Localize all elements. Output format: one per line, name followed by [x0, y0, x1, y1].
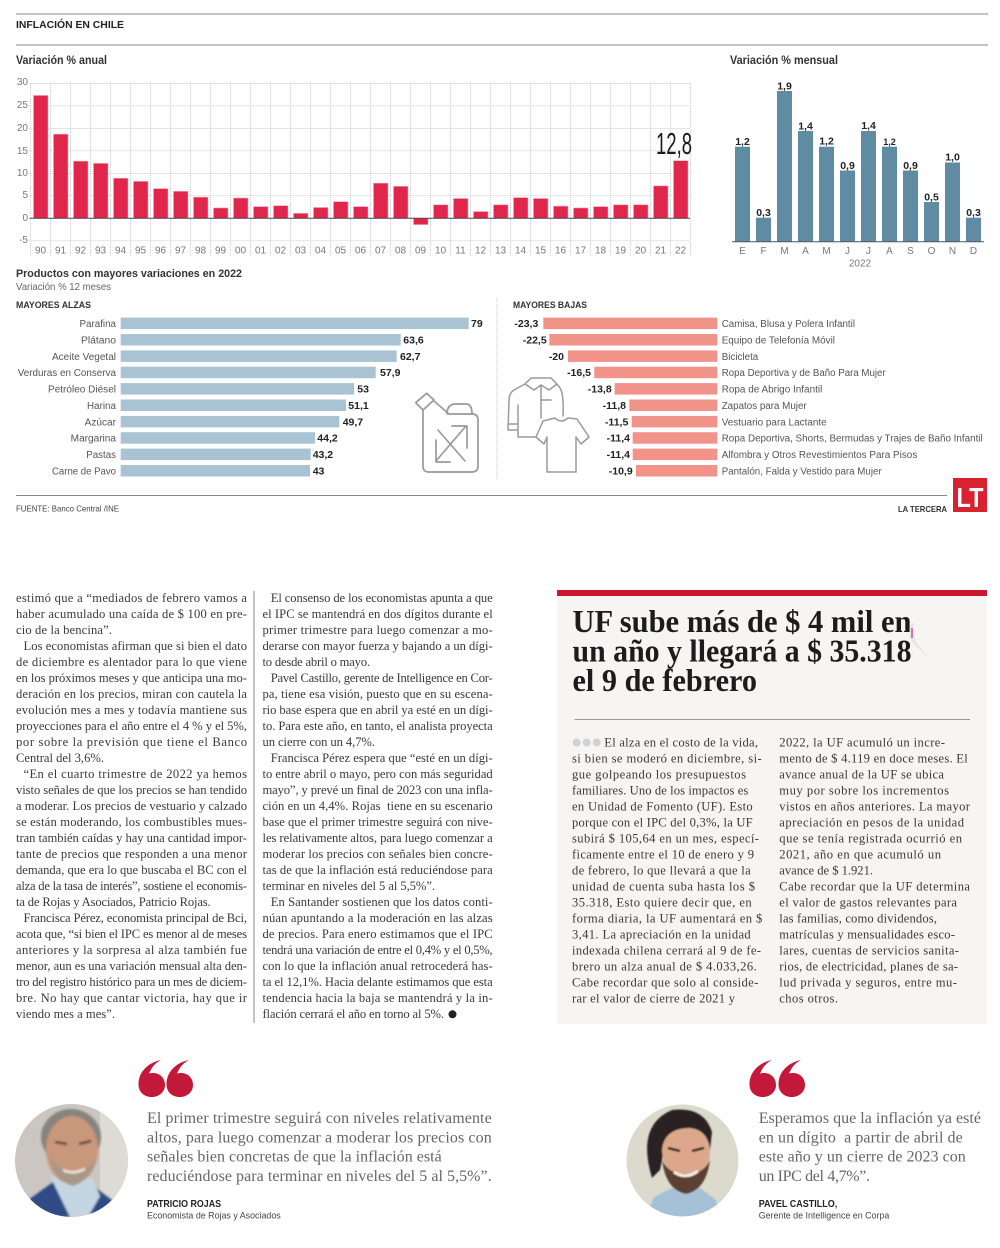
- product labels: increases: Azúcar: [85, 417, 117, 428]
- title: Inflación en Chile: INFLACIÓN EN CHILE: [16, 18, 124, 31]
- values: decreases: -20: [549, 351, 564, 363]
- monthly values: 0,9: [903, 160, 918, 172]
- article body: column 2: pa, tiene esa visión, puesto que en su escena-: [262, 687, 493, 701]
- x axis years: 17: [575, 246, 586, 256]
- quote text: en un dígito a partir de abril de: [759, 1129, 963, 1146]
- x axis years: 02: [275, 246, 286, 256]
- month labels: 2022: [849, 258, 872, 270]
- article body: column 1: por sobre la previsión que tiene el Banco: [16, 735, 247, 749]
- x axis years: 19: [615, 246, 626, 256]
- quote text: reduciéndose para terminar en niveles del 5 al 5,5%”.: [147, 1168, 492, 1185]
- article body: column 2: les relativamente altos, para luego comenzar a: [262, 831, 493, 845]
- month labels: J: [845, 246, 850, 257]
- x axis years: 96: [155, 246, 166, 256]
- article body: column 1: alza de la tasa de interés”, sostiene el economis-: [16, 879, 247, 893]
- x axis years: 09: [415, 246, 426, 256]
- product labels: increases: Harina: [87, 401, 116, 412]
- sidebar text: column 1: rar el valor de cierre de 2021 y: [572, 992, 736, 1006]
- sidebar text: column 1: El alza en el costo de la vida,: [604, 736, 758, 750]
- article body: column 2: primer trimestre para luego comenzar a mo-: [262, 623, 493, 637]
- sidebar text: column 1: 3,41. La apreciación en la unidad: [572, 928, 751, 942]
- article body: column 1: en los próximos meses y que anticipa una mo-: [16, 671, 247, 685]
- panel: largest decreases: [508, 300, 983, 477]
- sidebar text: column 2: Cabe recordar que la UF determina: [779, 880, 970, 894]
- sidebar text: column 2: lares, cuentas de servicios sanita-: [779, 944, 959, 958]
- heading: mayores bajas: MAYORES BAJAS: [513, 300, 587, 311]
- sidebar text: column 1: [572, 736, 762, 1006]
- sidebar text: column 2: vistos en años anteriores. La mayor: [779, 800, 971, 814]
- quote block: Patricio Rojas: [15, 1060, 492, 1222]
- x axis years: 10: [435, 246, 446, 256]
- article body: column 1: evolución mes a mes y todavía mantiene sus: [16, 703, 247, 717]
- article body: column 1: proyecciones para el año entre el 4 % y el 5%,: [16, 719, 247, 733]
- sidebar text: column 2: avance anual de la UF se ubica: [779, 768, 944, 782]
- product labels: decreases: Bicicleta: [722, 352, 759, 363]
- article body: column 2: mayo”, y prevé un final de 2023 con una infla-: [262, 783, 493, 797]
- quote text: [147, 1110, 492, 1185]
- y axis labels: 30: [17, 77, 28, 88]
- values: decreases: [514, 318, 633, 477]
- sidebar text: column 2: 2022, la UF acumuló un incre-: [779, 736, 945, 750]
- icon: clothes: [508, 378, 589, 472]
- values: decreases: -11,8: [603, 400, 626, 412]
- quote text: El primer trimestre seguirá con niveles relativamente: [147, 1110, 492, 1127]
- article body: column 1: “En el cuarto trimestre de 2022 ya hemos: [24, 767, 247, 781]
- values: decreases: -22,5: [523, 334, 547, 346]
- y axis labels: 25: [17, 100, 28, 111]
- quote text: un IPC del 4,7%”.: [759, 1168, 870, 1185]
- x axis years: 22: [675, 246, 686, 256]
- monthly values: 0,5: [924, 192, 939, 204]
- quote block: Pavel Castillo: [626, 1060, 981, 1222]
- y axis labels: 5: [22, 190, 28, 201]
- attribution: PAVEL CASTILLO,: [759, 1199, 837, 1210]
- product labels: increases: Aceite Vegetal: [52, 352, 116, 363]
- sidebar text: column 2: que se tenía registrada ocurrió en: [779, 832, 963, 846]
- monthly values: 1,2: [883, 137, 896, 147]
- article body: column 2: Pavel Castillo, gerente de Intelligence en Cor-: [271, 671, 493, 685]
- sidebar text: column 2: apreciación en pesos de la unidad: [779, 816, 965, 830]
- x axis years: 07: [375, 246, 386, 256]
- logo: La Tercera: LA TERCERA: [898, 504, 947, 514]
- month labels: A: [886, 246, 893, 257]
- headline: UF sube más de $ 4 mil en: [572, 603, 912, 639]
- y axis labels: 15: [17, 146, 28, 157]
- article body: column 1: cio de la bencina”.: [16, 623, 112, 637]
- portrait: Patricio Rojas: [15, 1104, 128, 1217]
- article body: column 1: a moderar. Los precios de vestuario y calzado: [16, 799, 247, 813]
- article body: column 2: base que el primer trimestre seguirá con nive-: [262, 815, 493, 829]
- sidebar text: column 2: muy por sobre los incrementos: [779, 784, 949, 798]
- article body: column 1: deración en los precios, miran con cautela la: [16, 687, 247, 701]
- sidebar text: column 2: las familias, como dividendos,: [779, 912, 937, 926]
- sidebar text: column 1: gue golpeando los presupuestos: [572, 768, 746, 782]
- sidebar text: column 1: subirá $ 105,64 en un mes, especí-: [572, 832, 759, 846]
- footer: source: FUENTE: Banco Central /INE: [16, 504, 119, 514]
- sidebar text: column 1: indexada chilena cerrará al 9 de fe-: [572, 944, 761, 958]
- sidebar text: column 2: el valor de gastos relevantes para: [779, 896, 957, 910]
- article body: column 2: tendencia hacia la baja se mantendrá y la in-: [262, 991, 493, 1005]
- icon: fuel can: [416, 393, 478, 472]
- product labels: decreases: Ropa de Abrigo Infantil: [722, 384, 822, 396]
- panel: monthly variation chart: [730, 55, 984, 270]
- month labels: M: [822, 246, 831, 257]
- x axis years: 04: [315, 246, 326, 256]
- article body: column 1: haber acumulado una caída de $ 100 en pre-: [16, 607, 247, 621]
- quote text: [759, 1110, 981, 1185]
- article body: column 1: de diciembre es alentador para lo que viene: [16, 655, 247, 669]
- article body: column 1: anteriores y la sorpresa al alza también fue: [16, 943, 247, 957]
- month labels: F: [760, 246, 767, 257]
- y axis labels: 20: [17, 123, 28, 134]
- x axis years: 20: [635, 246, 646, 256]
- values: increases: 44,2: [317, 433, 338, 445]
- x axis years: 11: [455, 246, 466, 256]
- heading: mayores alzas: MAYORES ALZAS: [16, 300, 91, 311]
- monthly values: 0,3: [966, 207, 981, 219]
- sidebar text: column 1: 35.318, Esto quiere decir que, en: [572, 896, 752, 910]
- bars: annual inflation: [34, 95, 688, 225]
- monthly values: [735, 80, 981, 219]
- article body: column 1: bre. No hay que cantar victoria, hay que ir: [16, 991, 248, 1005]
- article body: column 2: tas de que la inflación está reduciéndose para: [262, 863, 493, 877]
- monthly values: 1,9: [777, 80, 792, 92]
- values: increases: [313, 318, 483, 477]
- product labels: decreases: Alfombra y Otros Revestimientos Para Pisos: [722, 450, 917, 461]
- monthly values: 1,0: [945, 152, 960, 164]
- values: decreases: -23,3: [514, 318, 538, 330]
- heading: annual variation: Variación % anual: [16, 55, 107, 67]
- month labels: M: [780, 246, 789, 257]
- headline: el 9 de febrero: [572, 662, 757, 698]
- values: decreases: -10,9: [609, 465, 633, 477]
- bars: decreases: [543, 318, 717, 476]
- article body: column 2: de precios. Para enero estimamos que el IPC: [262, 927, 493, 941]
- x axis years: 06: [355, 246, 366, 256]
- article body: column 2: to. Para este año, en tanto, el analista proyecta: [262, 719, 493, 733]
- product labels: decreases: Ropa Deportiva, Shorts, Bermudas y Trajes de Baño Infantil: [722, 434, 983, 445]
- values: increases: 63,6: [403, 334, 424, 346]
- product labels: decreases: Zapatos para Mujer: [722, 401, 807, 412]
- x axis years: 93: [95, 246, 106, 256]
- values: increases: 79: [471, 318, 483, 330]
- article body: column 2: ción en un 4,4%. Rojas tiene en su escenario: [262, 799, 493, 813]
- headline: [572, 603, 912, 698]
- values: decreases: -11,5: [605, 416, 628, 428]
- x axis years: 21: [655, 246, 666, 256]
- article body: column 2: to desde abril o mayo.: [262, 655, 370, 669]
- month labels: O: [928, 246, 936, 257]
- sidebar text: column 1: brero un alza anual de $ 4.033,26.: [572, 960, 757, 974]
- article body: column 1: viendo mes a mes”.: [16, 1007, 115, 1021]
- values: increases: 53: [357, 384, 369, 396]
- monthly values: 1,4: [861, 120, 876, 132]
- sidebar text: column 2: rios, de electricidad, planes de sa-: [779, 960, 958, 974]
- product labels: decreases: Pantalón, Falda y Vestido para Mujer: [722, 466, 882, 477]
- attribution: PATRICIO ROJAS: [147, 1199, 221, 1210]
- quote block: Patricio Rojas: Economista de Rojas y Asociados: [147, 1210, 281, 1222]
- x axis years: 13: [495, 246, 506, 256]
- x axis years: 15: [535, 246, 546, 256]
- article body: column 2: núan apuntando a la moderación en las alzas: [262, 911, 493, 925]
- article body: column 1: estimó que a “mediados de febrero vamos a: [16, 591, 247, 605]
- article body: column 2: derarse con mayor fuerza y bajando a un dígi-: [262, 639, 493, 653]
- month labels: A: [802, 246, 809, 257]
- x axis years: [35, 246, 686, 256]
- callout: 12,8: 12,8: [656, 126, 692, 161]
- sidebar text: column 1: unidad de cuenta suba hasta los $: [572, 880, 755, 894]
- y axis labels: [17, 77, 28, 246]
- x axis years: 08: [395, 246, 406, 256]
- values: increases: 43,2: [313, 449, 333, 461]
- sidebar text: column 2: 2021, año en que acumuló un: [779, 848, 942, 862]
- article body: column 1: [16, 591, 248, 1021]
- values: decreases: -11,4: [607, 449, 630, 461]
- x axis years: 95: [135, 246, 146, 256]
- sidebar text: column 1: si bien se moderó en diciembre, si-: [572, 752, 762, 766]
- heading: products with largest variations: [16, 268, 242, 293]
- heading: products with largest variations: Productos con mayores variaciones en 2022: [16, 268, 242, 280]
- product labels: decreases: [722, 319, 983, 477]
- logo: La Tercera: [898, 478, 987, 514]
- heading: monthly variation: Variación % mensual: [730, 55, 838, 67]
- panel: largest increases: [16, 300, 483, 477]
- article body: column 2: ta el 12,1%. Hacia delante estimamos que esta: [262, 975, 493, 989]
- x axis years: 98: [195, 246, 206, 256]
- article body: column 1: tante de precios que responden a una menor: [16, 847, 248, 861]
- sidebar text: column 2: chos otros.: [779, 992, 838, 1006]
- y axis labels: 0: [22, 213, 28, 224]
- x axis years: 94: [115, 246, 126, 256]
- product labels: increases: Parafina: [80, 319, 116, 330]
- x axis years: 90: [35, 246, 46, 256]
- quote block: Pavel Castillo: Gerente de Intelligence en Corpa: [759, 1210, 890, 1222]
- month labels: D: [970, 246, 977, 257]
- panel: UF sidebar: [557, 590, 987, 1024]
- product labels: decreases: Equipo de Telefonía Móvil: [722, 335, 835, 346]
- sidebar text: column 1: forma diaria, la UF aumentará en $: [572, 912, 762, 926]
- x axis years: 97: [175, 246, 186, 256]
- article body: column 2: En Santander sostienen que los datos conti-: [271, 895, 493, 909]
- month labels: N: [949, 246, 956, 257]
- heading: products with largest variations: Variación % 12 meses: [16, 281, 111, 293]
- values: increases: 49,7: [343, 416, 363, 428]
- quote text: señales bien concretas de que la inflación está: [147, 1149, 442, 1166]
- x axis years: 18: [595, 246, 606, 256]
- article body: column 1: acota que, “si bien el IPC es menor al de meses: [16, 927, 247, 941]
- article body: column 2: el IPC se mantendrá en dos dígitos durante el: [262, 607, 493, 621]
- x axis years: 16: [555, 246, 566, 256]
- y axis labels: -5: [19, 235, 28, 246]
- icon: three dots: [573, 738, 601, 746]
- product labels: decreases: Ropa Deportiva y de Baño Para Mujer: [722, 368, 886, 379]
- article body: column 2: Francisca Pérez espera que “esté en un dígi-: [271, 751, 493, 765]
- quote text: este año y un cierre de 2023 con: [759, 1149, 966, 1166]
- icon: quotation marks: [138, 1060, 193, 1097]
- article body: column 2: flación cerrará el año en torno al 5%.: [262, 1007, 444, 1021]
- article body: column 2: con lo que la inflación anual retrocederá has-: [262, 959, 493, 973]
- article body: column 1: demanda, que era lo que buscaba el BC con el: [16, 863, 248, 877]
- bars: increases: [121, 318, 469, 476]
- x axis years: 14: [515, 246, 526, 256]
- product labels: increases: Plátano: [81, 335, 116, 346]
- product labels: increases: Carne de Pavo: [52, 466, 116, 477]
- article body: column 1: tran también caídas y hay una cantidad impor-: [16, 831, 247, 845]
- product labels: increases: Verduras en Conserva: [18, 368, 116, 379]
- article body: column 2: El consenso de los economistas apunta a que: [271, 591, 493, 605]
- logo: La Tercera: LT: [956, 482, 984, 513]
- sidebar text: column 1: ficamente entre el 10 de enero y 9: [572, 848, 754, 862]
- monthly values: 0,9: [840, 160, 855, 172]
- headline: un año y llegará a $ 35.318: [572, 632, 912, 668]
- month labels: S: [907, 246, 914, 257]
- values: decreases: -11,4: [607, 433, 630, 445]
- article body: column 2: to entre abril o mayo, pero con más seguridad: [262, 767, 493, 781]
- article body: column 1: se están moderando, los combustibles mues-: [16, 815, 247, 829]
- article body: column 2: rio base espera que en abril ya esté en un dígi-: [262, 703, 493, 717]
- article body: column 1: Francisca Pérez, economista principal de Bci,: [24, 911, 247, 925]
- article body: column 1: ta de Rojas y Asociados, Patricio Rojas.: [16, 895, 211, 909]
- portrait: Pavel Castillo: [626, 1104, 739, 1217]
- values: increases: 51,1: [348, 400, 369, 412]
- article body: column 2: moderar los precios con señales bien concre-: [262, 847, 493, 861]
- monthly values: 1,2: [735, 136, 750, 148]
- values: increases: 62,7: [400, 351, 421, 363]
- x axis years: 03: [295, 246, 306, 256]
- panel: annual variation chart: [16, 55, 692, 256]
- article body: column 1: menor, aun es una variación mensual alta den-: [16, 959, 247, 973]
- product labels: increases: Petróleo Diésel: [48, 384, 116, 396]
- article body: column 2: terminar en niveles del 5 al 5,5%”.: [262, 879, 435, 893]
- monthly values: 1,2: [819, 136, 834, 148]
- month labels: J: [866, 246, 871, 257]
- icon: quotation marks: [749, 1060, 805, 1097]
- values: increases: 43: [313, 465, 325, 477]
- x axis years: 91: [55, 246, 66, 256]
- product labels: decreases: Camisa, Blusa y Polera Infantil: [722, 319, 855, 330]
- product labels: decreases: Vestuario para Lactante: [722, 417, 827, 428]
- sidebar text: column 2: lud privada y seguros, entre mu-: [779, 976, 957, 990]
- values: decreases: -16,5: [567, 367, 591, 379]
- article body: column 2: un cierre con un 4,7%.: [262, 735, 375, 749]
- x axis years: 99: [215, 246, 226, 256]
- x axis years: 92: [75, 246, 86, 256]
- sidebar text: column 1: Cabe recordar que solo al conside-: [572, 976, 758, 990]
- x axis years: 12: [475, 246, 486, 256]
- sidebar text: column 1: porque con el IPC del 0,3%, la UF: [572, 816, 753, 830]
- article body: column 1: Los economistas afirman que si bien el dato: [24, 639, 247, 653]
- article body: column 2: [262, 591, 493, 1021]
- product labels: increases: [18, 319, 117, 477]
- article body: column 2: tendrá una variación de entre el 0,4% y el 0,5%,: [262, 943, 493, 957]
- x axis years: 05: [335, 246, 346, 256]
- y axis labels: 10: [17, 168, 28, 179]
- sidebar text: column 1: familiares. Uno de los impactos es: [572, 784, 748, 798]
- sidebar text: column 2: matrículas y mensualidades esco-: [779, 928, 955, 942]
- product labels: increases: Pastas: [86, 450, 116, 461]
- sidebar text: column 1: en Unidad de Fomento (UF). Esto: [572, 800, 753, 814]
- monthly values: 0,3: [756, 207, 771, 219]
- article body: column 1: visto señales de que los precios se han tendido: [16, 783, 247, 797]
- x axis years: 00: [235, 246, 246, 256]
- values: decreases: -13,8: [588, 384, 612, 396]
- article body: column 1: Central del 3,6%.: [16, 751, 104, 765]
- month labels: E: [739, 246, 746, 257]
- bars: monthly inflation: [735, 91, 981, 242]
- sidebar text: column 2: [779, 736, 971, 1006]
- article body: column 1: tro del registro histórico para un mes de diciem-: [16, 975, 247, 989]
- product labels: increases: Margarina: [71, 434, 116, 445]
- values: increases: 57,9: [380, 367, 401, 379]
- sidebar text: column 2: avance de $ 1.921.: [779, 864, 873, 878]
- quote text: Esperamos que la inflación ya esté: [759, 1110, 981, 1127]
- monthly values: 1,4: [798, 120, 813, 132]
- sidebar text: column 2: mento de $ 4.119 en doce meses. El: [779, 752, 968, 766]
- sidebar text: column 1: de febrero, lo que llevará a que la: [572, 864, 751, 878]
- quote text: altos, para luego comenzar a moderar los precios con: [147, 1129, 492, 1146]
- x axis years: 01: [255, 246, 266, 256]
- month labels: [739, 246, 977, 270]
